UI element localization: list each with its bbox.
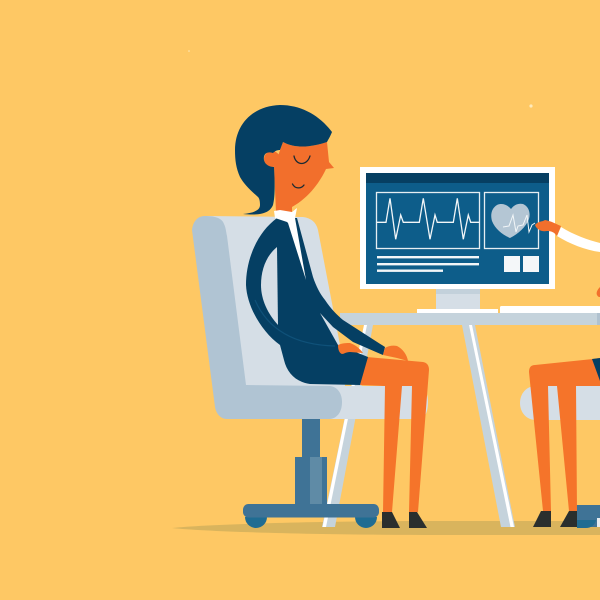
jacket xyxy=(246,218,385,385)
doctor's hand and sleeve xyxy=(535,220,600,297)
monitor frame xyxy=(360,167,555,289)
right chair base xyxy=(575,505,600,528)
screen xyxy=(366,173,549,284)
chair post xyxy=(302,419,320,459)
patient's legs xyxy=(360,357,429,528)
monitor stand xyxy=(436,289,480,310)
patient's hands xyxy=(338,343,408,361)
specks xyxy=(188,50,533,108)
chair back xyxy=(205,216,345,400)
eye xyxy=(294,156,310,164)
doctor's legs xyxy=(529,358,600,527)
patient's shoes xyxy=(382,512,400,528)
patient xyxy=(235,105,429,528)
right chair seat xyxy=(520,386,600,420)
chair seen through arm xyxy=(261,247,278,325)
desk xyxy=(340,313,600,325)
monitor foot xyxy=(417,309,498,314)
left chair xyxy=(192,216,428,505)
chair side xyxy=(192,216,342,419)
floor shadow xyxy=(172,521,600,535)
right desk leg xyxy=(462,325,515,527)
doctor's shoes xyxy=(533,511,551,527)
neck and face xyxy=(264,142,334,212)
chair seat xyxy=(240,386,428,419)
hair xyxy=(235,105,332,215)
screen title bar xyxy=(366,173,549,183)
ECG panel xyxy=(376,192,480,248)
monitor xyxy=(360,167,555,314)
screen buttons xyxy=(504,256,539,272)
text lines xyxy=(377,256,479,272)
chair column xyxy=(295,457,327,505)
mouth xyxy=(292,184,304,188)
collar and shirt xyxy=(274,208,306,280)
heart panel xyxy=(484,192,538,248)
sleeve seam xyxy=(255,300,335,346)
desk keyboard xyxy=(500,306,600,314)
left desk leg xyxy=(322,325,373,527)
chair base xyxy=(243,504,379,528)
